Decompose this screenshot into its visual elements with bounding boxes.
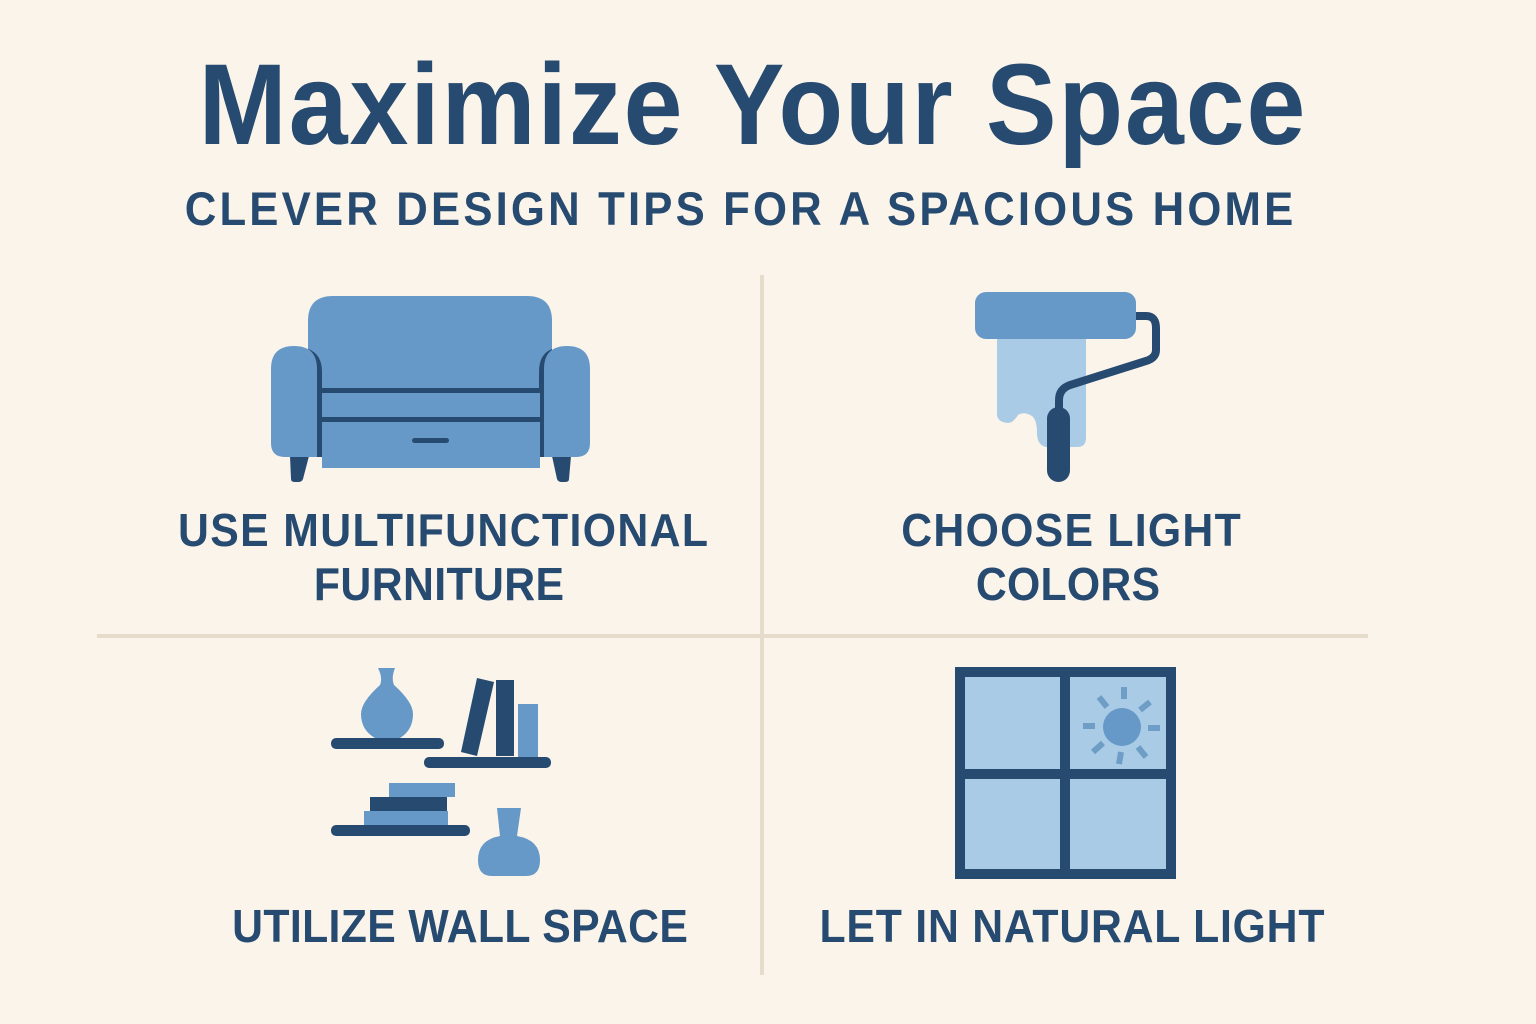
label: use multifunctional furniture: FURNITURE xyxy=(314,560,564,610)
label: choose light colors: CHOOSE LIGHT xyxy=(901,506,1241,556)
icon: window with sun xyxy=(955,667,1176,879)
label: choose light colors xyxy=(901,506,1241,610)
label: choose light colors: COLORS xyxy=(976,560,1160,610)
panel: natural light xyxy=(820,667,1324,952)
label: use multifunctional furniture xyxy=(178,506,708,610)
label: use multifunctional furniture: USE MULTIFUNCTIONAL xyxy=(178,506,708,556)
label: let in natural light: LET IN NATURAL LIGHT xyxy=(820,902,1324,952)
icon: paint roller xyxy=(975,292,1156,482)
label: utilize wall space: UTILIZE WALL SPACE xyxy=(232,902,688,952)
panel: wall space xyxy=(232,668,688,952)
icon: shelves with books and vases xyxy=(331,668,551,876)
title: Maximize Your Space xyxy=(199,41,1305,169)
panel: light colors xyxy=(901,292,1241,610)
panel: multifunctional furniture xyxy=(178,296,708,610)
subtitle: CLEVER DESIGN TIPS FOR A SPACIOUS HOME xyxy=(185,183,1293,235)
icon: sofa xyxy=(271,296,590,482)
